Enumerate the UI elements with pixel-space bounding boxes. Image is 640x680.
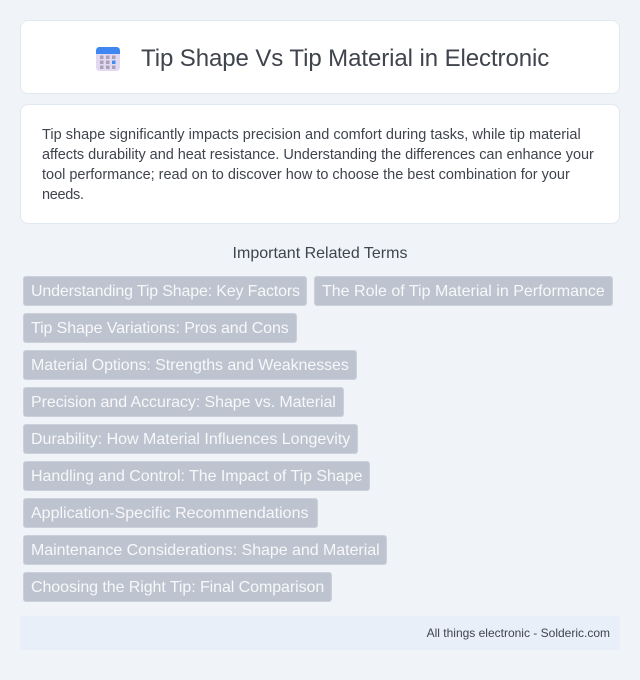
icon: calendar — [96, 47, 120, 71]
intro text panel — [20, 104, 620, 224]
intro paragraph: needs. — [42, 187, 84, 203]
tag — [23, 313, 297, 343]
footer bar — [20, 616, 620, 650]
intro paragraph: Tip shape significantly impacts precision and comfort during tasks, while tip material — [42, 127, 581, 143]
tag — [314, 276, 613, 306]
intro paragraph: tool performance; read on to discover how to choose the best combination for your — [42, 167, 570, 183]
tag: Understanding Tip Shape: Key Factors — [31, 283, 300, 300]
tag: Choosing the Right Tip: Final Comparison — [31, 579, 324, 596]
section heading: Important Related Terms — [233, 245, 407, 262]
tag — [23, 498, 318, 528]
tag: Material Options: Strengths and Weaknesses — [31, 357, 349, 374]
tag: Precision and Accuracy: Shape vs. Material — [31, 394, 336, 411]
footer credit: All things electronic - Solderic.com — [427, 626, 610, 640]
tag: Maintenance Considerations: Shape and Material — [31, 542, 380, 559]
tag — [23, 276, 307, 306]
intro paragraph: affects durability and heat resistance. Understanding the differences can enhance your — [42, 147, 594, 163]
tag — [23, 424, 358, 454]
title: Tip Shape Vs Tip Material in Electronic — [141, 45, 549, 72]
intro paragraph — [42, 127, 594, 203]
tag — [23, 461, 370, 491]
tag — [23, 535, 387, 565]
tag — [23, 350, 357, 380]
tag: Tip Shape Variations: Pros and Cons — [31, 320, 289, 337]
tag — [23, 572, 332, 602]
tag: Handling and Control: The Impact of Tip Shape — [31, 468, 362, 485]
tag — [23, 387, 344, 417]
tag: Application-Specific Recommendations — [31, 505, 308, 522]
header card — [20, 20, 620, 94]
tag: Durability: How Material Influences Longevity — [31, 431, 350, 448]
tag: The Role of Tip Material in Performance — [322, 283, 605, 300]
